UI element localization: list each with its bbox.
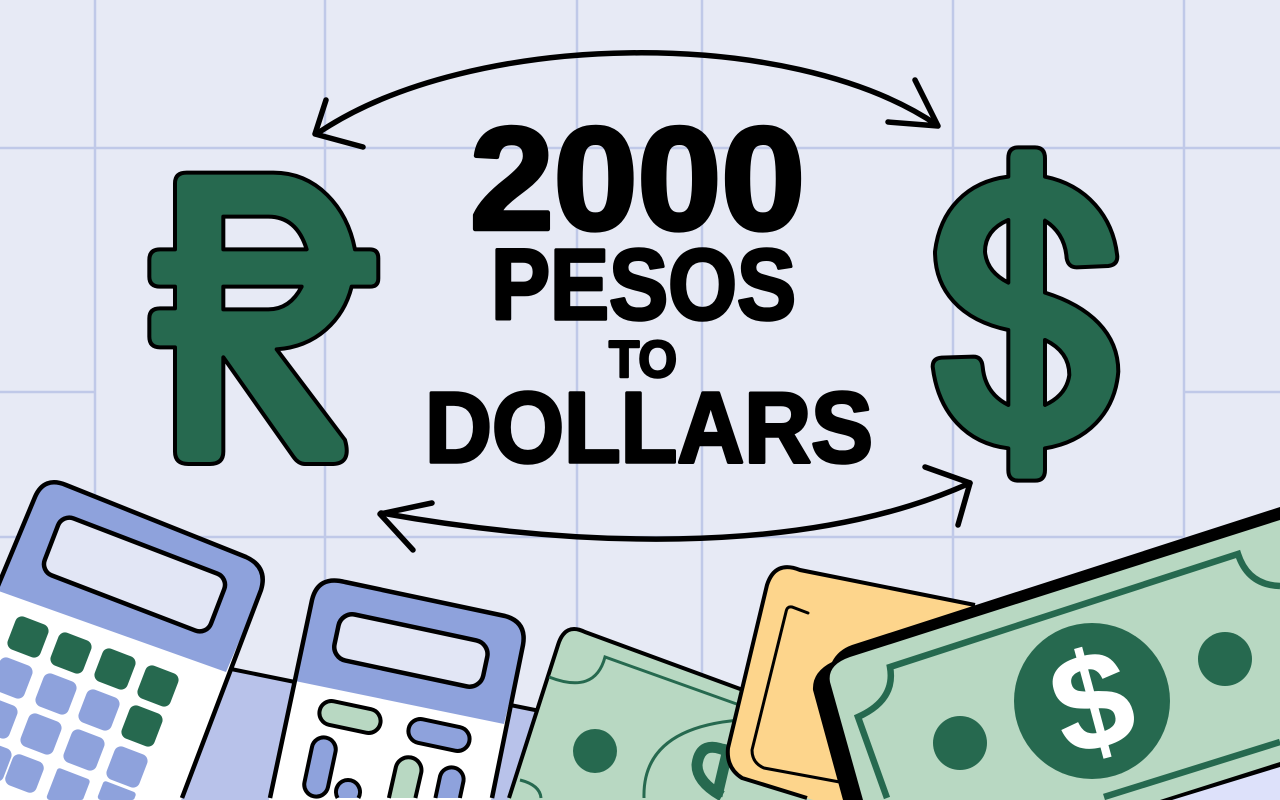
seal with dollar sign: $: [1035, 618, 1149, 786]
icon: dollar currency symbol: [933, 147, 1118, 481]
icon: partial dollar sign on small banknote: [697, 745, 729, 796]
banknote: large, front: [813, 507, 1280, 800]
calculator buttons: [302, 699, 472, 799]
banknote: small, back: [508, 629, 860, 800]
calculator display: [40, 514, 229, 635]
calculator keys: dark green: [5, 614, 181, 749]
arrow: top curved exchange arrow: [315, 53, 938, 147]
calculator: left: [0, 482, 263, 800]
calculator: right: [269, 580, 524, 800]
calculator back panels: [181, 668, 545, 800]
heading line: pesos: PESOS: [491, 229, 796, 341]
calculator display: [332, 612, 490, 689]
heading line: 2000: 2000: [470, 97, 805, 260]
connector word: to: TO: [609, 331, 677, 389]
arrow: bottom curved exchange arrow: [380, 467, 970, 550]
calculator keys: blue: [0, 655, 150, 797]
icon: peso currency symbol: [149, 173, 378, 464]
title: 2000 pesos to dollars: [425, 97, 873, 484]
heading line: dollars: DOLLARS: [425, 372, 873, 484]
note card: orange: [728, 567, 975, 800]
